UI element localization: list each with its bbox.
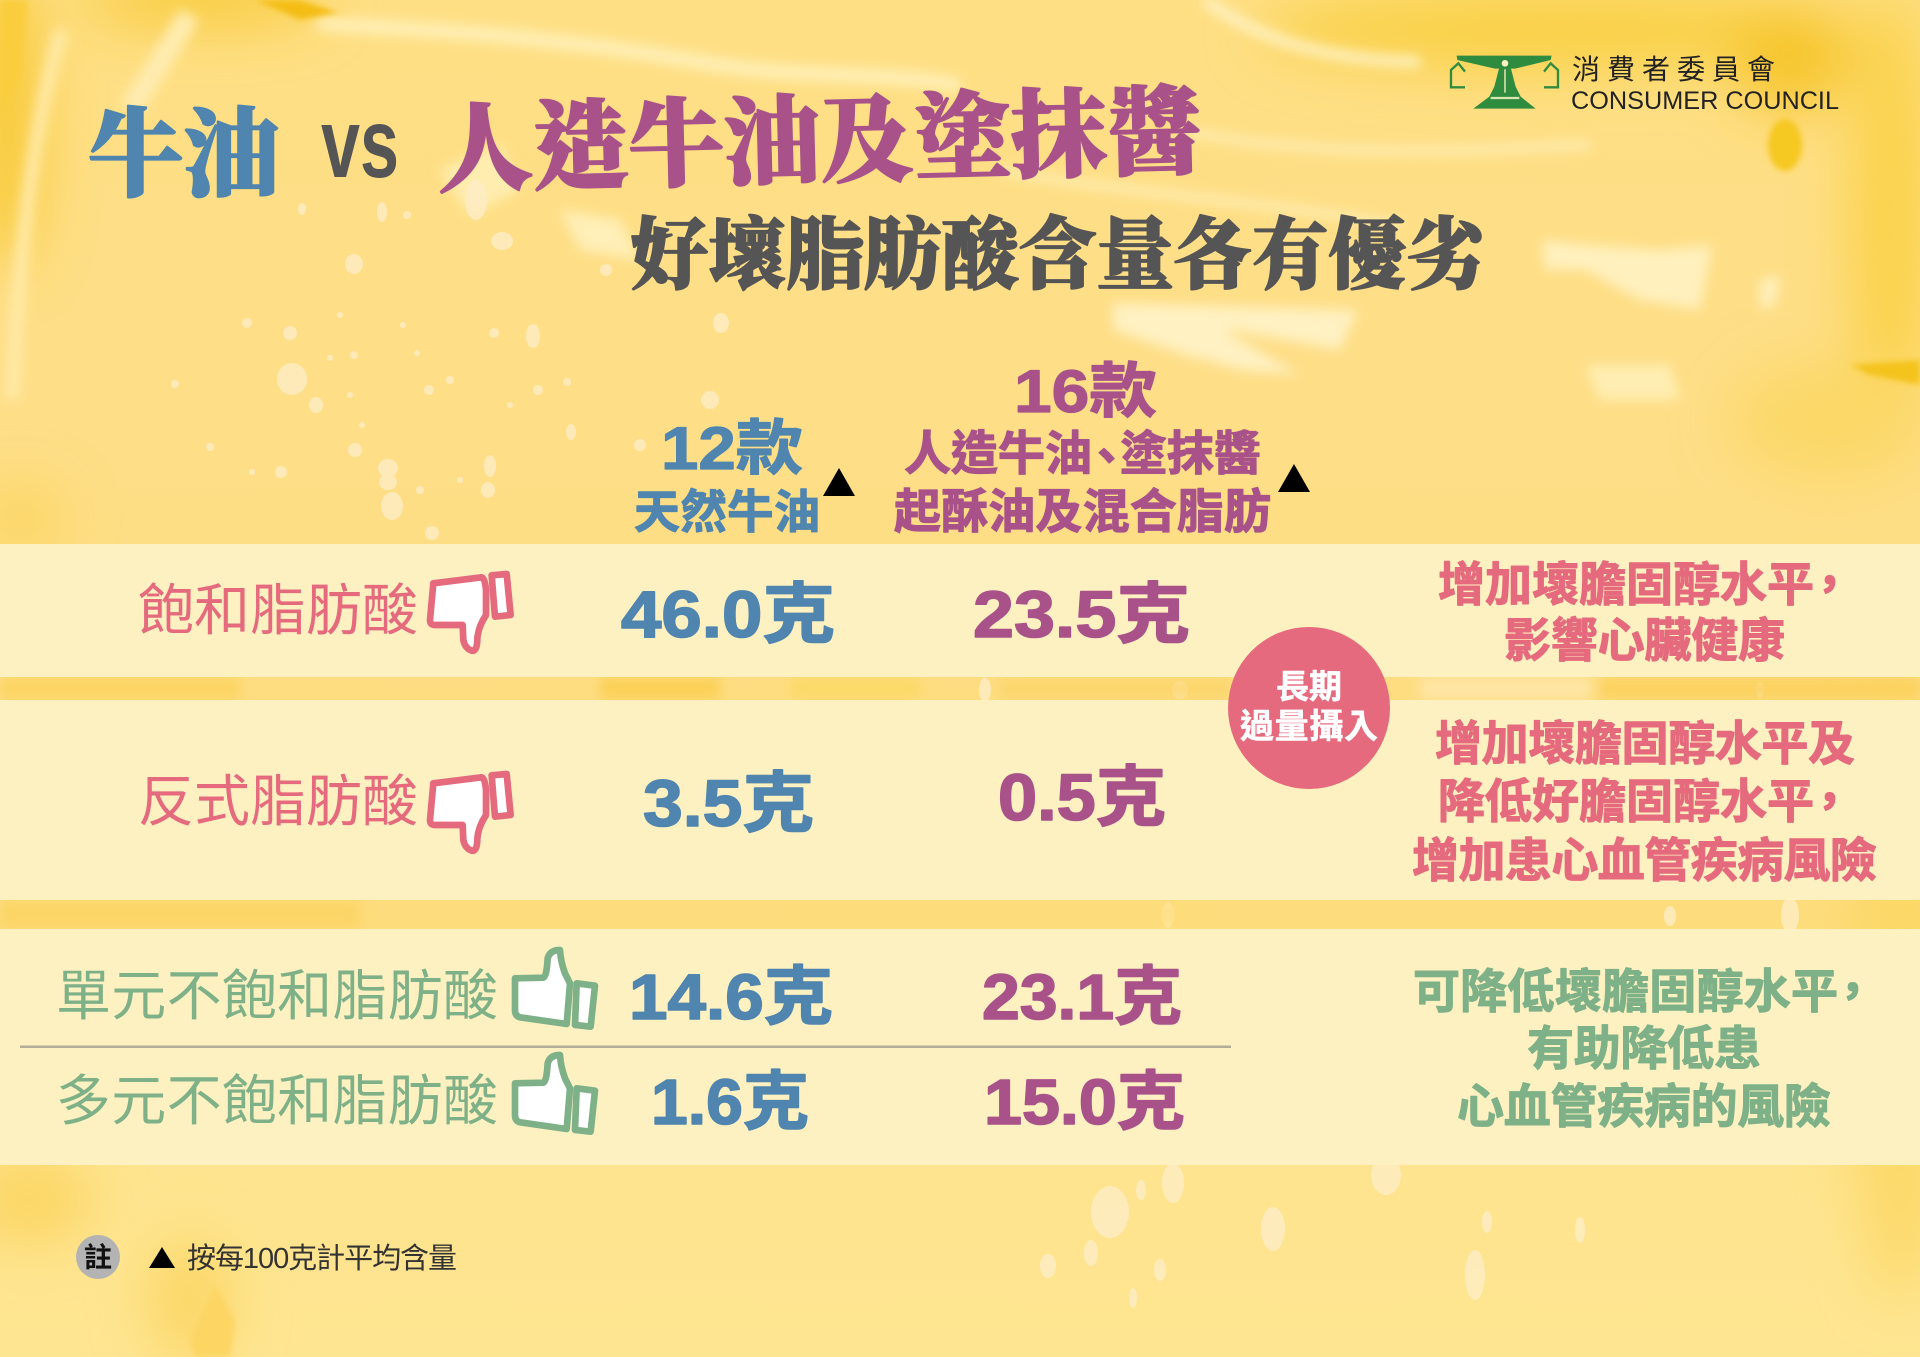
text: unsaturated fat benefits (1413, 965, 1876, 1133)
icon: scales (1451, 56, 1558, 109)
icon: thumbs up (515, 950, 595, 1027)
text: saturated fat effects: ， (1806, 558, 1853, 611)
row: polyunsaturated fat: 1.6克 (651, 1066, 809, 1138)
callout: long-term excess intake: 過量攝入 (1240, 708, 1378, 746)
band: trans fats (0, 700, 1920, 900)
icon: thumbs down (430, 774, 511, 851)
triangle marker (1278, 464, 1310, 492)
row: saturated fat (138, 574, 1190, 651)
saturated gap tones (0, 677, 1920, 929)
title: butter vs margarine (88, 79, 1203, 209)
text: unsaturated fat benefits: 心血管疾病的風險 (1457, 1080, 1831, 1133)
row: polyunsaturated fat (56, 1055, 1185, 1138)
text: unsaturated fat benefits: ， (1829, 965, 1876, 1018)
column header: 16 margarines (894, 358, 1271, 538)
row: monounsaturated fat: 14.6克 (629, 961, 833, 1033)
triangle marker (823, 468, 855, 496)
callout: long-term excess intake (1228, 627, 1390, 789)
divider (20, 1046, 1231, 1048)
title: butter vs margarine: vs (321, 88, 399, 198)
text: trans fat effects: 增加患心血管疾病風險 (1412, 834, 1877, 887)
text: saturated fat effects: 增加壞膽固醇水平 (1438, 558, 1814, 611)
row: polyunsaturated fat: 15.0克 (984, 1066, 1185, 1138)
title: butter vs margarine: 人造牛油及塗抹醬 (436, 79, 1203, 205)
icon: thumbs down (430, 574, 511, 651)
column header: 12 butters (634, 415, 820, 538)
row: trans fat (138, 760, 1166, 851)
column header: 16 margarines: 塗抹醬 (1120, 427, 1261, 480)
text: trans fat effects: ， (1806, 775, 1853, 828)
text: trans fat effects (1412, 717, 1877, 887)
column header: 16 margarines: 起酥油及混合脂肪 (894, 485, 1271, 538)
text: saturated fat effects: 影響心臟健康 (1504, 614, 1785, 667)
callout: long-term excess intake: 長期 (1276, 668, 1342, 705)
row: polyunsaturated fat: 多元不飽和脂肪酸 (56, 1070, 498, 1132)
icon: thumbs up (515, 1055, 595, 1132)
droplets (171, 180, 1799, 1308)
text: saturated fat effects (1438, 558, 1853, 667)
row: monounsaturated fat (56, 950, 1182, 1033)
subtitle: 好壞脂肪酸含量各有優劣 (631, 212, 1490, 299)
title: butter vs margarine: 牛油 (88, 102, 279, 209)
footnote: 按每100克計平均含量 (187, 1242, 457, 1275)
column header: 16 margarines: 、 (1083, 430, 1130, 483)
footnote (76, 1235, 457, 1279)
row: trans fat: 3.5克 (643, 766, 814, 840)
row: saturated fat: 23.5克 (973, 577, 1190, 651)
column header: 12 butters: 天然牛油 (634, 486, 820, 538)
row: monounsaturated fat: 單元不飽和脂肪酸 (56, 965, 498, 1027)
band: unsaturated fats (0, 929, 1920, 1165)
text: unsaturated fat benefits: 可降低壞膽固醇水平 (1413, 965, 1838, 1018)
logo: Consumer Council: 消費者委員會 (1572, 54, 1775, 85)
row: saturated fat: 46.0克 (621, 577, 835, 651)
logo: Consumer Council (1451, 54, 1839, 115)
row: saturated fat: 飽和脂肪酸 (138, 579, 418, 642)
row: monounsaturated fat: 23.1克 (982, 961, 1182, 1033)
band: saturated fats (0, 544, 1920, 677)
text: trans fat effects: 降低好膽固醇水平 (1438, 775, 1814, 828)
text: trans fat effects: 增加壞膽固醇水平及 (1435, 717, 1855, 770)
column header: 16 margarines: 人造牛油 (904, 427, 1092, 480)
footnote: 註 (84, 1242, 112, 1273)
row: trans fat: 反式脂肪酸 (138, 770, 418, 833)
column header: 16 margarines: 16款 (1014, 358, 1157, 425)
text: unsaturated fat benefits: 有助降低患 (1527, 1022, 1761, 1075)
logo: Consumer Council: CONSUMER COUNCIL (1571, 87, 1839, 115)
column header: 12 butters: 12款 (661, 415, 803, 482)
row: trans fat: 0.5克 (998, 760, 1166, 834)
